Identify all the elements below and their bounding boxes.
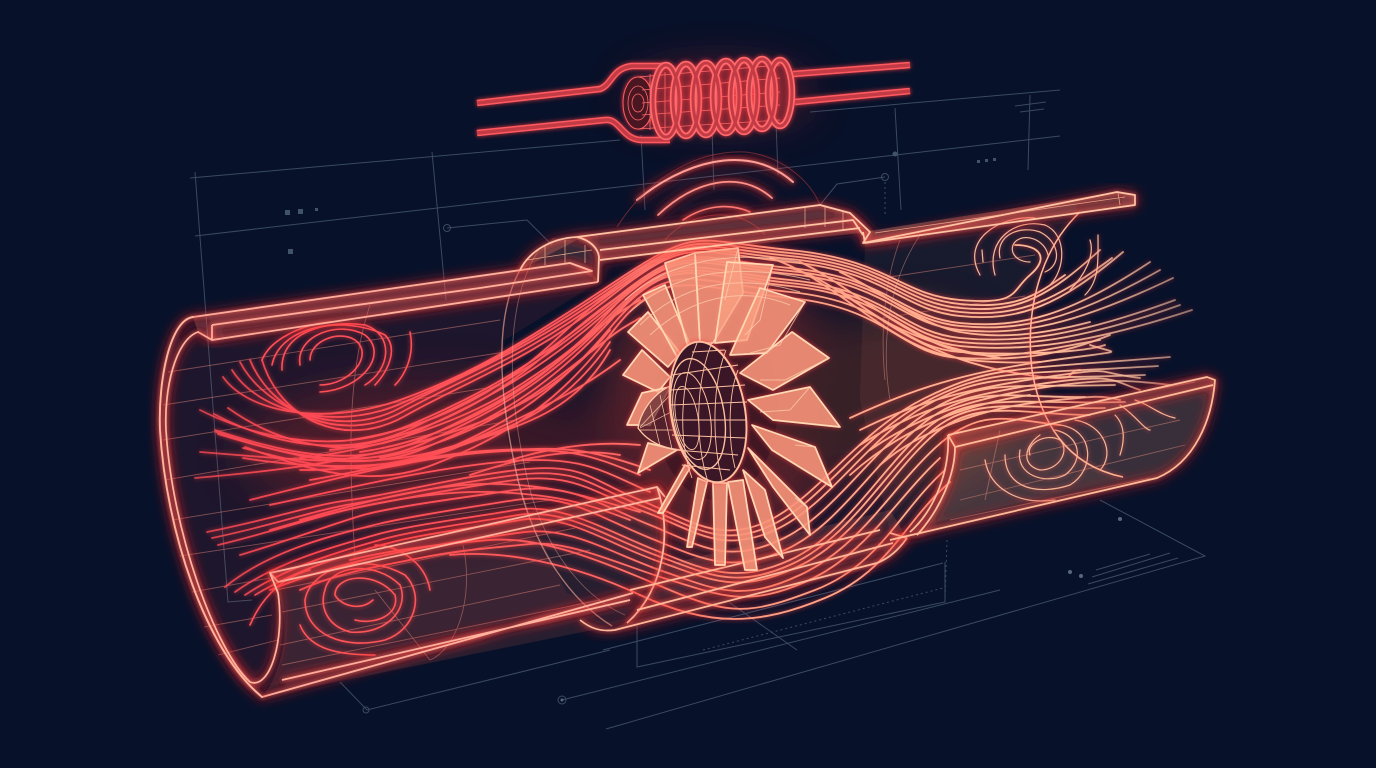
blade lower left 17 (638, 443, 677, 473)
pipe lower shell: left edge lines (262, 487, 665, 697)
faint field arcs (617, 152, 820, 240)
fan hub with mesh (659, 336, 757, 488)
right pipe interior (860, 212, 1123, 533)
blade bottom 15 (687, 478, 707, 547)
fan behind glow (654, 310, 778, 500)
blade lower right 11 (748, 448, 810, 535)
blade top 5 (695, 248, 743, 343)
pipe upper rim fills (193, 192, 1135, 340)
streamlines: upper band (195, 241, 1192, 478)
blueprint grid: back plane (190, 90, 1060, 602)
blade right 9 (748, 387, 840, 427)
blade top-left 2 (628, 312, 680, 367)
throat section: bulge ring (502, 235, 920, 626)
blade bottom 14 (713, 483, 727, 565)
blueprint grid: floor plane (340, 500, 1205, 729)
blade top-left 3 (643, 285, 690, 357)
left pipe interior (162, 283, 610, 690)
blade right 8 (740, 332, 829, 390)
pipe wire rings and longitudinal lines (163, 240, 1195, 665)
coil leads (477, 65, 910, 140)
pipe upper rim: left strip edges (193, 263, 598, 340)
blade right 10 (752, 425, 832, 487)
flange cap and top strip edges (520, 192, 1135, 282)
streamlines: lower band (207, 345, 1170, 619)
blade left 18 (627, 387, 670, 425)
right throat curve (1030, 212, 1123, 477)
blade right 7 (730, 288, 805, 355)
vortex: lower left (250, 545, 430, 655)
coil core mesh (623, 77, 653, 129)
pipe lower shell fills (262, 377, 1215, 697)
blade top-left 1 (623, 350, 670, 392)
pipe opening lip (160, 317, 280, 697)
blade bottom 13 (728, 480, 757, 570)
lines over upper blades and blade folds (625, 248, 829, 507)
coil windings (653, 59, 792, 137)
pipe lower shell: right edge lines (890, 377, 1215, 540)
electromagnetic arcs above pipe (637, 160, 793, 220)
ambient glow (240, 69, 1020, 560)
blade top 6 (715, 262, 773, 343)
blade top 4 (665, 253, 700, 347)
vortex: lower right (985, 400, 1175, 501)
vortex: upper right (975, 218, 1098, 295)
flange cap mesh (527, 193, 1125, 265)
fan nose cone (638, 385, 685, 450)
coil component (477, 59, 910, 140)
blade bottom 16 (658, 465, 690, 513)
coil winding inner bands (653, 59, 792, 137)
fan blades (623, 248, 840, 570)
throat lower edge (580, 530, 907, 631)
blade bottom 12 (743, 470, 783, 558)
vortex: upper left (262, 322, 411, 392)
